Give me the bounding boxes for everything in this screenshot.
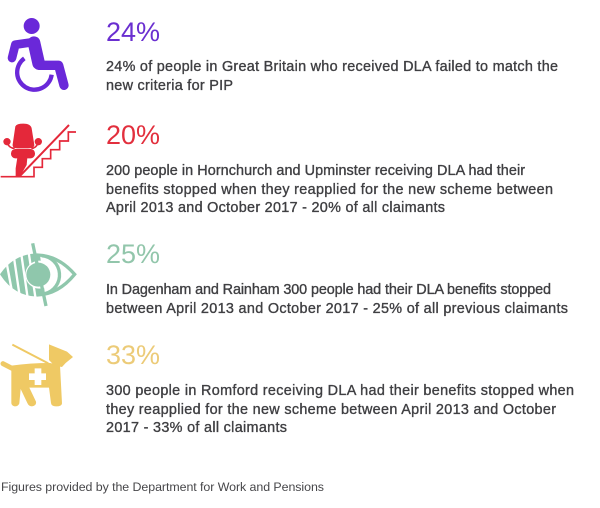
text: 33% description [106,383,574,436]
text: 20% description: benefits stopped when they reapplied for the new scheme between [106,182,553,198]
text: 24% description: 24% of people in Great Britain who received DLA failed to match the [106,59,558,75]
heading: 20%: 20% [106,120,160,150]
text: 25% description: between April 2013 and October 2017 - 25% of all previous claimants [106,301,568,317]
text: 33% description: 300 people in Romford receiving DLA had their benefits stopped when [106,383,574,399]
icon: wheelchair user [12,18,64,90]
text: 24% description [106,59,558,94]
text: 33% description: 2017 - 33% of all claimants [106,420,287,436]
text: 25% description [106,282,568,317]
footnote: source: Figures provided by the Department for Work and Pensions [1,480,324,494]
heading: 33%: 33% [106,340,160,370]
text: 25% description: In Dagenham and Rainham 300 people had their DLA benefits stopped [106,282,551,298]
text: 20% description [106,163,553,216]
heading: 24%: 24% [106,17,160,47]
text: 20% description: April 2013 and October 2017 - 20% of all claimants [106,200,445,216]
text: 33% description: they reapplied for the new scheme between April 2013 and October [106,402,556,418]
heading: 25%: 25% [106,239,160,269]
text: 24% description: new criteria for PIP [106,78,233,94]
text: 20% description: 200 people in Hornchurch and Upminster receiving DLA had their [106,163,525,179]
icon: guide dog [3,344,73,406]
icon: stairlift [1,124,76,177]
icon: partially sighted eye [2,243,75,306]
